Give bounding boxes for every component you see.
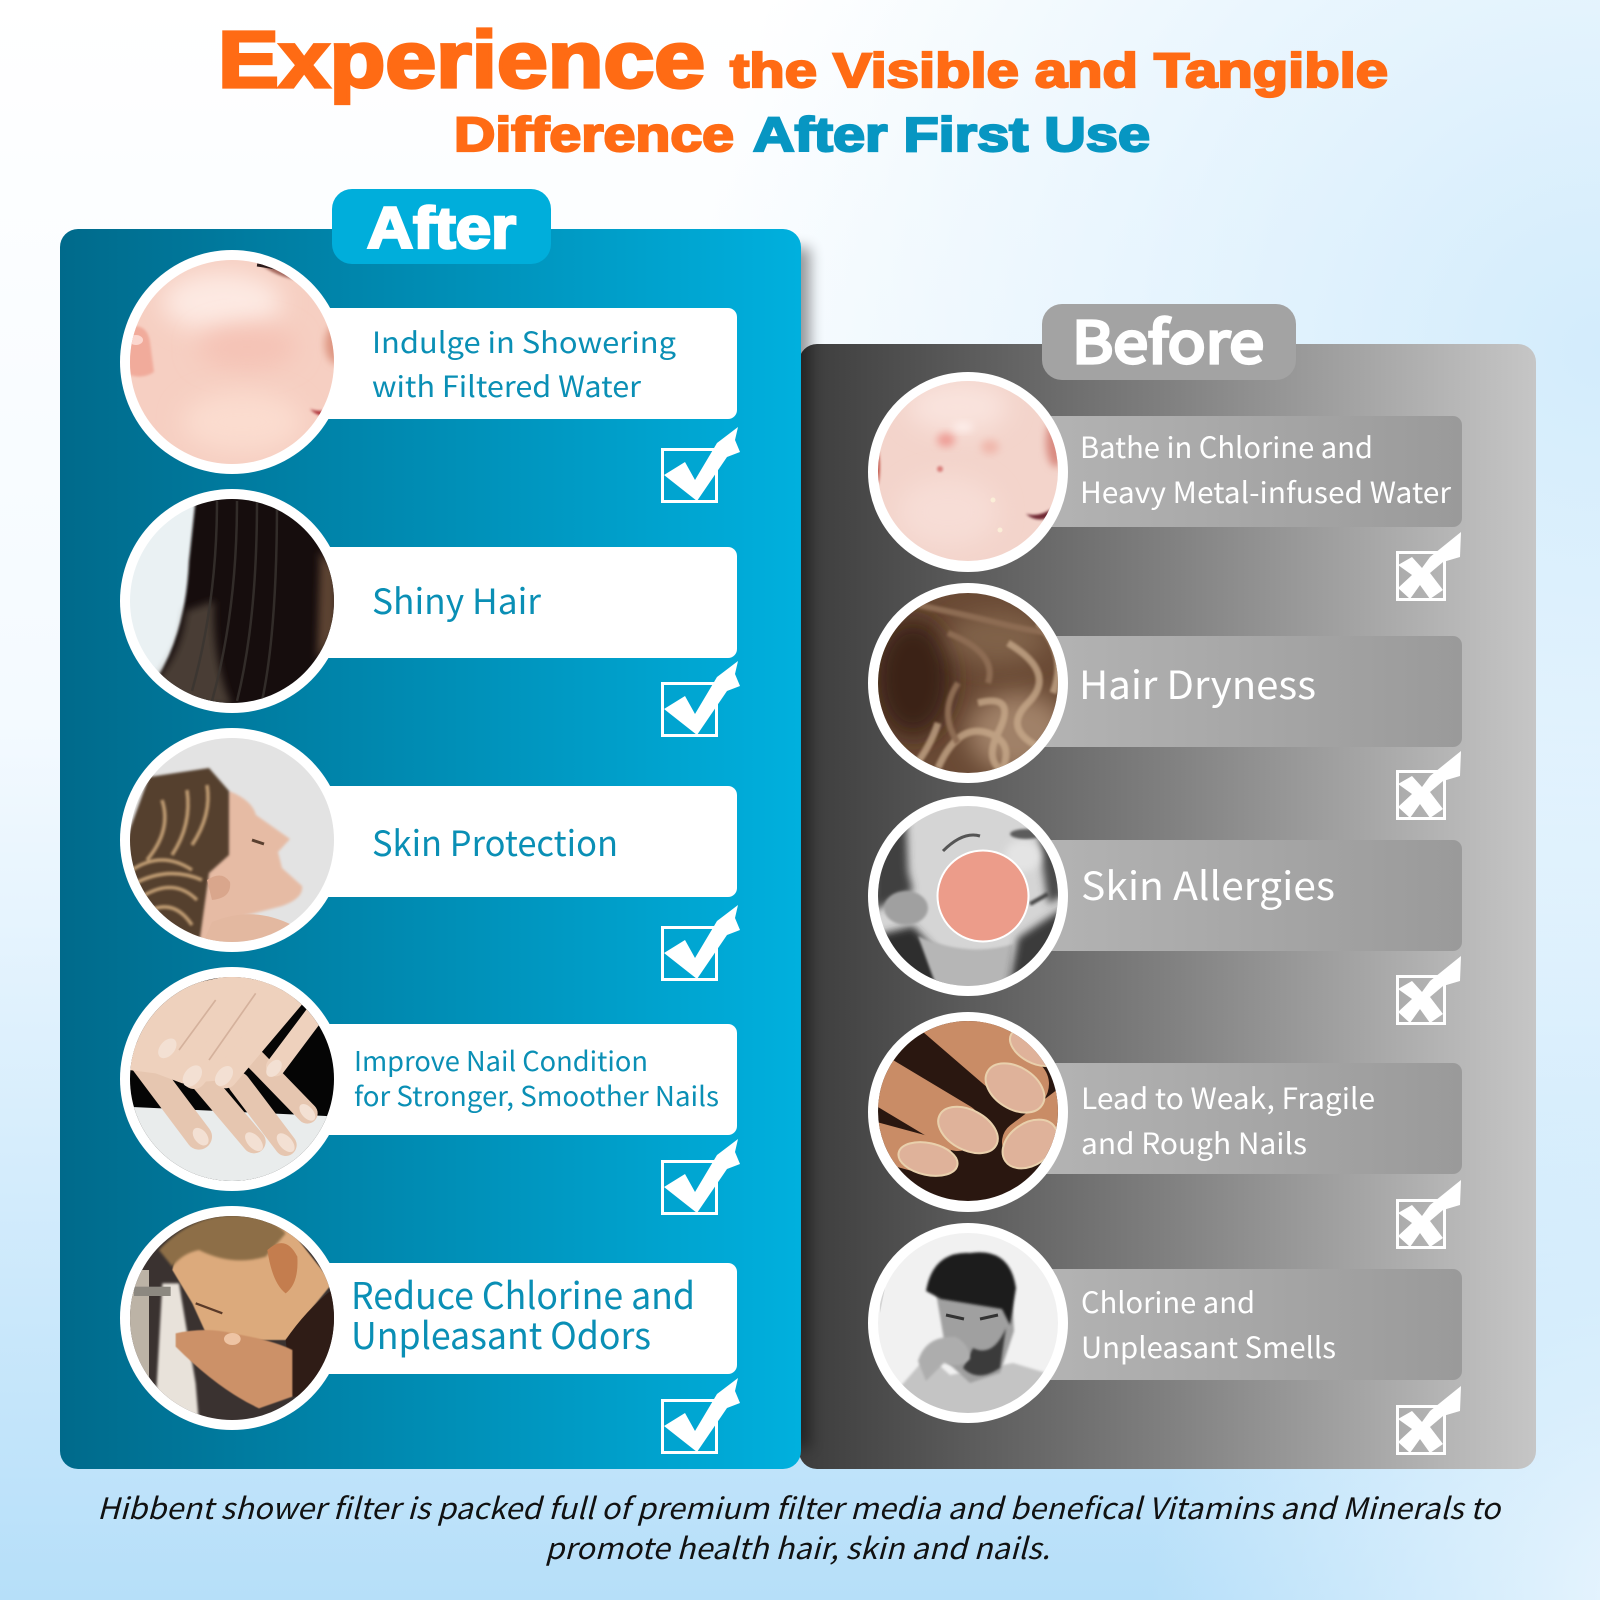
- after row 5: reduce chlorine: [120, 1206, 740, 1452]
- label: reduce chlorine: Unpleasant Odors: [351, 1306, 651, 1360]
- photo: shiny hair: [127, 496, 337, 706]
- check mark: [662, 427, 740, 502]
- label: filtered water: [372, 320, 676, 406]
- label: chlorine water: [1080, 425, 1452, 512]
- title: Experience: [218, 15, 705, 104]
- cross mark: [1398, 956, 1461, 1024]
- title: After First Use: [753, 109, 1150, 162]
- before tab: Before: [1072, 298, 1264, 380]
- label: skin allergies: Skin Allergies: [1081, 856, 1335, 912]
- check mark: [662, 1378, 740, 1452]
- check mark: [662, 661, 740, 736]
- label: chlorine water: Bathe in Chlorine and: [1080, 425, 1373, 467]
- photo: woman profile: [127, 735, 337, 945]
- after tab: [332, 189, 551, 264]
- label: unpleasant smells: Unpleasant Smells: [1081, 1325, 1336, 1367]
- label: nail condition: [354, 1040, 719, 1114]
- label: shiny hair: Shiny Hair: [372, 574, 541, 625]
- label: unpleasant smells: Chlorine and: [1081, 1280, 1255, 1322]
- photo: weak nails: [878, 1021, 1058, 1201]
- before row 4: weak nails: [863, 997, 1462, 1248]
- photo: clear skin: [130, 260, 334, 464]
- photo: dry hair: [878, 593, 1058, 773]
- after row 4: nail condition: [120, 967, 740, 1214]
- before row 2: hair dryness: [868, 583, 1462, 818]
- before row 3: skin allergies: [868, 796, 1462, 1024]
- photo: skin allergy: [878, 806, 1058, 986]
- cross mark: [1398, 751, 1461, 818]
- label: filtered water: Indulge in Showering: [372, 320, 676, 362]
- after row 1: filtered water: [120, 250, 740, 502]
- label: unpleasant smells: [1081, 1280, 1336, 1367]
- label: hair dryness: Hair Dryness: [1079, 655, 1316, 711]
- caption: [97, 1486, 1502, 1568]
- title: Difference: [454, 109, 734, 162]
- cross mark: [1398, 1180, 1461, 1248]
- title: [218, 15, 1388, 162]
- before tab: [1042, 298, 1296, 380]
- label: weak nails: [1081, 1076, 1375, 1163]
- label: skin protection: Skin Protection: [372, 816, 618, 867]
- before row 1: chlorine water: [868, 372, 1462, 600]
- label: reduce chlorine: [351, 1266, 695, 1360]
- check mark: [662, 905, 740, 980]
- caption: Hibbent shower filter is packed full of premium filter media and benefical Vitamins and Minerals to: [97, 1486, 1502, 1528]
- panel: before: [799, 298, 1536, 1469]
- photo: smooth nails: [126, 973, 339, 1187]
- panel: after: [60, 189, 810, 1469]
- photo: washing face: [126, 1210, 339, 1427]
- label: reduce chlorine: Reduce Chlorine and: [351, 1266, 695, 1320]
- label: chlorine water: Heavy Metal-infused Water: [1080, 470, 1452, 512]
- photo: acne skin: [878, 381, 1058, 561]
- title: the Visible and Tangible: [730, 45, 1388, 98]
- caption: promote health hair, skin and nails.: [545, 1526, 1050, 1568]
- after tab: After: [367, 196, 516, 261]
- label: filtered water: with Filtered Water: [372, 364, 642, 406]
- before row 5: unpleasant smells: [868, 1223, 1462, 1454]
- after row 2: shiny hair: [120, 489, 740, 736]
- label: nail condition: Improve Nail Condition: [354, 1040, 648, 1079]
- cross mark: [1398, 1386, 1461, 1454]
- after row 3: skin protection: [120, 728, 740, 980]
- check mark: [662, 1139, 740, 1214]
- photo: man holding nose: [878, 1233, 1058, 1413]
- cross mark: [1398, 532, 1461, 600]
- label: weak nails: Lead to Weak, Fragile: [1081, 1076, 1375, 1118]
- label: nail condition: for Stronger, Smoother Nails: [354, 1075, 719, 1114]
- label: weak nails: and Rough Nails: [1081, 1121, 1307, 1163]
